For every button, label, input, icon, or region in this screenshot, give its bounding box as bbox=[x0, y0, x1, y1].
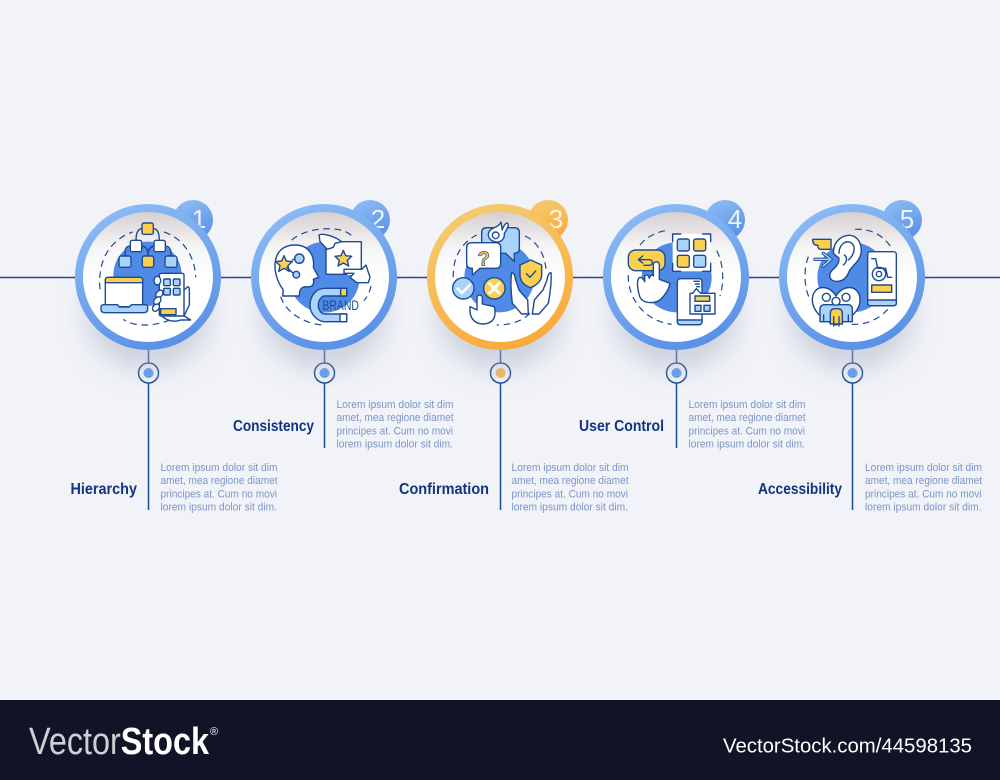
description 1: lorem ipsum dolor sit dim. bbox=[160, 502, 277, 514]
icon: head with stars, framed star, brand magnet bbox=[275, 229, 371, 325]
description 5: Lorem ipsum dolor sit dim bbox=[865, 462, 982, 474]
icon: speech bubbles, check and cross, shield in hands: ? bbox=[477, 247, 490, 270]
registered mark: ® bbox=[210, 726, 218, 738]
node marker 4 bbox=[666, 363, 686, 383]
description 3: principes at. Cum no movi bbox=[512, 488, 628, 500]
connector line 4 bbox=[676, 345, 678, 448]
description 1 bbox=[160, 462, 278, 514]
description 3: amet, mea regione diamet bbox=[512, 475, 628, 487]
step 5: Accessibility bbox=[758, 200, 982, 514]
description 1: principes at. Cum no movi bbox=[160, 488, 277, 500]
heading: User Control: User Control bbox=[579, 418, 664, 435]
step 3: Confirmation bbox=[399, 200, 628, 514]
connector line 1 bbox=[148, 345, 150, 510]
description 4: amet, mea regione diamet bbox=[688, 412, 806, 424]
number badge 5 bbox=[882, 200, 922, 240]
description 1: Lorem ipsum dolor sit dim bbox=[160, 462, 278, 474]
shadow 4 bbox=[614, 254, 738, 370]
timeline axis bbox=[0, 276, 1000, 278]
icon: hierarchy chart, laptop and phone bbox=[100, 223, 196, 325]
shadow 2 bbox=[262, 254, 386, 370]
ring 3 bbox=[427, 204, 573, 350]
description 5 bbox=[865, 462, 982, 514]
ring 4 bbox=[603, 204, 749, 350]
number badge 1: 1 bbox=[192, 204, 206, 234]
number badge 2 bbox=[350, 200, 390, 240]
shadow 3 bbox=[438, 254, 562, 370]
step 1: Hierarchy bbox=[70, 200, 278, 514]
number badge 4: 4 bbox=[728, 204, 742, 234]
description 4: Lorem ipsum dolor sit dim bbox=[688, 399, 806, 411]
description 5: lorem ipsum dolor sit dim. bbox=[865, 502, 982, 514]
step 2: Consistency bbox=[233, 200, 454, 450]
number badge 5: 5 bbox=[900, 204, 914, 234]
node marker 5 bbox=[842, 363, 862, 383]
description 3 bbox=[512, 462, 628, 514]
icon: head with stars, framed star, brand magnet: BRAND bbox=[322, 297, 359, 313]
connector line 2 bbox=[324, 345, 326, 448]
footer band bbox=[0, 700, 1000, 780]
description 2: Lorem ipsum dolor sit dim bbox=[336, 399, 454, 411]
description 2: lorem ipsum dolor sit dim. bbox=[336, 438, 453, 450]
heading: Consistency: Consistency bbox=[233, 418, 314, 435]
description 2 bbox=[336, 399, 454, 450]
description 4 bbox=[688, 399, 806, 450]
ring 1 bbox=[75, 204, 221, 350]
node marker 2 bbox=[314, 363, 334, 383]
connector line 3 bbox=[500, 345, 502, 510]
description 2: principes at. Cum no movi bbox=[336, 426, 453, 438]
number badge 1 bbox=[173, 200, 213, 240]
description 2: amet, mea regione diamet bbox=[336, 412, 454, 424]
description 4: principes at. Cum no movi bbox=[688, 426, 805, 438]
description 3: Lorem ipsum dolor sit dim bbox=[512, 462, 628, 474]
number badge 3: 3 bbox=[549, 204, 563, 234]
description 1: amet, mea regione diamet bbox=[160, 475, 278, 487]
description 4: lorem ipsum dolor sit dim. bbox=[688, 438, 805, 450]
description 5: amet, mea regione diamet bbox=[865, 475, 982, 487]
ring 2 bbox=[251, 204, 397, 350]
ring 5 bbox=[779, 204, 925, 350]
icon: back button, tile grid, phone bbox=[628, 230, 723, 325]
footer logo: VectorStock bbox=[29, 721, 210, 763]
description 5: principes at. Cum no movi bbox=[865, 488, 982, 500]
shadow 1 bbox=[86, 254, 210, 370]
heading: Accessibility: Accessibility bbox=[758, 481, 842, 498]
connector line 5 bbox=[852, 345, 854, 510]
icon: speech bubbles, check and cross, shield in hands bbox=[453, 222, 551, 325]
node marker 1 bbox=[138, 363, 158, 383]
shadow 5 bbox=[790, 254, 914, 370]
node marker 3 bbox=[490, 363, 510, 383]
description 3: lorem ipsum dolor sit dim. bbox=[512, 502, 628, 514]
number badge 3 bbox=[528, 200, 568, 240]
icon: ear, wheelchair phone, people in heart bbox=[805, 229, 896, 326]
step 4: User Control bbox=[579, 200, 806, 450]
number badge 2: 2 bbox=[371, 204, 385, 234]
number badge 4 bbox=[705, 200, 745, 240]
footer id: VectorStock.com/44598135 bbox=[723, 736, 972, 758]
heading: Hierarchy: Hierarchy bbox=[70, 481, 137, 498]
heading: Confirmation: Confirmation bbox=[399, 481, 489, 498]
